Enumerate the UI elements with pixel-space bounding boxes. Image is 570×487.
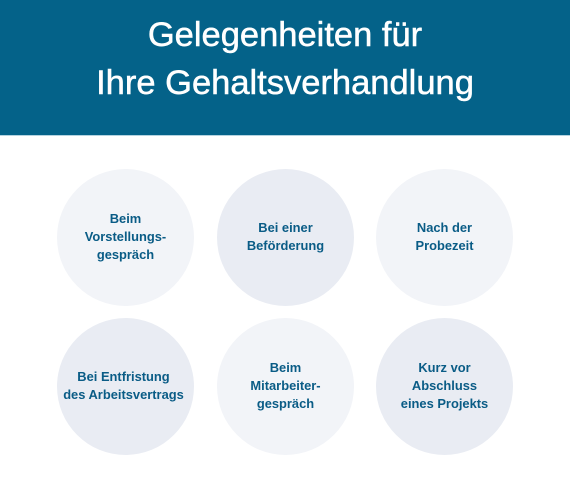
circle: Nach der Probezeit: Probezeit [415,238,474,253]
circle: Kurz vor Abschluss eines Projekts [376,318,513,455]
circle: Bei Entfristung des Arbeitsvertrags [57,318,194,455]
circle: Beim Vorstellungsgespräch: gespräch [97,247,154,262]
title: Gelegenheiten für [148,16,422,54]
circle: Kurz vor Abschluss eines Projekts: eines Projekts [401,396,488,411]
circle: Beim Vorstellungsgespräch: Vorstellungs- [85,229,166,244]
circle: Bei Entfristung des Arbeitsvertrags: Bei Entfristung [77,369,170,384]
circle: Beim Vorstellungsgespräch [57,169,194,306]
title [96,16,474,102]
circle: Kurz vor Abschluss eines Projekts: Kurz vor [418,360,471,375]
circle: Bei Entfristung des Arbeitsvertrags: des Arbeitsvertrags [63,387,184,402]
circle: Kurz vor Abschluss eines Projekts: Abschluss [412,378,477,393]
circle: Bei einer Beförderung: Bei einer [258,220,313,235]
header banner [0,0,570,136]
circle: Bei einer Beförderung [217,169,354,306]
circle: Beim Mitarbeitergespräch [217,318,354,455]
circle: Beim Vorstellungsgespräch: Beim [110,211,141,226]
circle: Bei einer Beförderung: Beförderung [247,238,324,253]
circle: Beim Mitarbeitergespräch: Beim [270,360,301,375]
circle: Beim Mitarbeitergespräch: Mitarbeiter- [250,378,321,393]
circle: Beim Mitarbeitergespräch: gespräch [257,396,314,411]
title: Ihre Gehaltsverhandlung [96,64,474,102]
circle: Nach der Probezeit: Nach der [417,220,472,235]
circle: Nach der Probezeit [376,169,513,306]
